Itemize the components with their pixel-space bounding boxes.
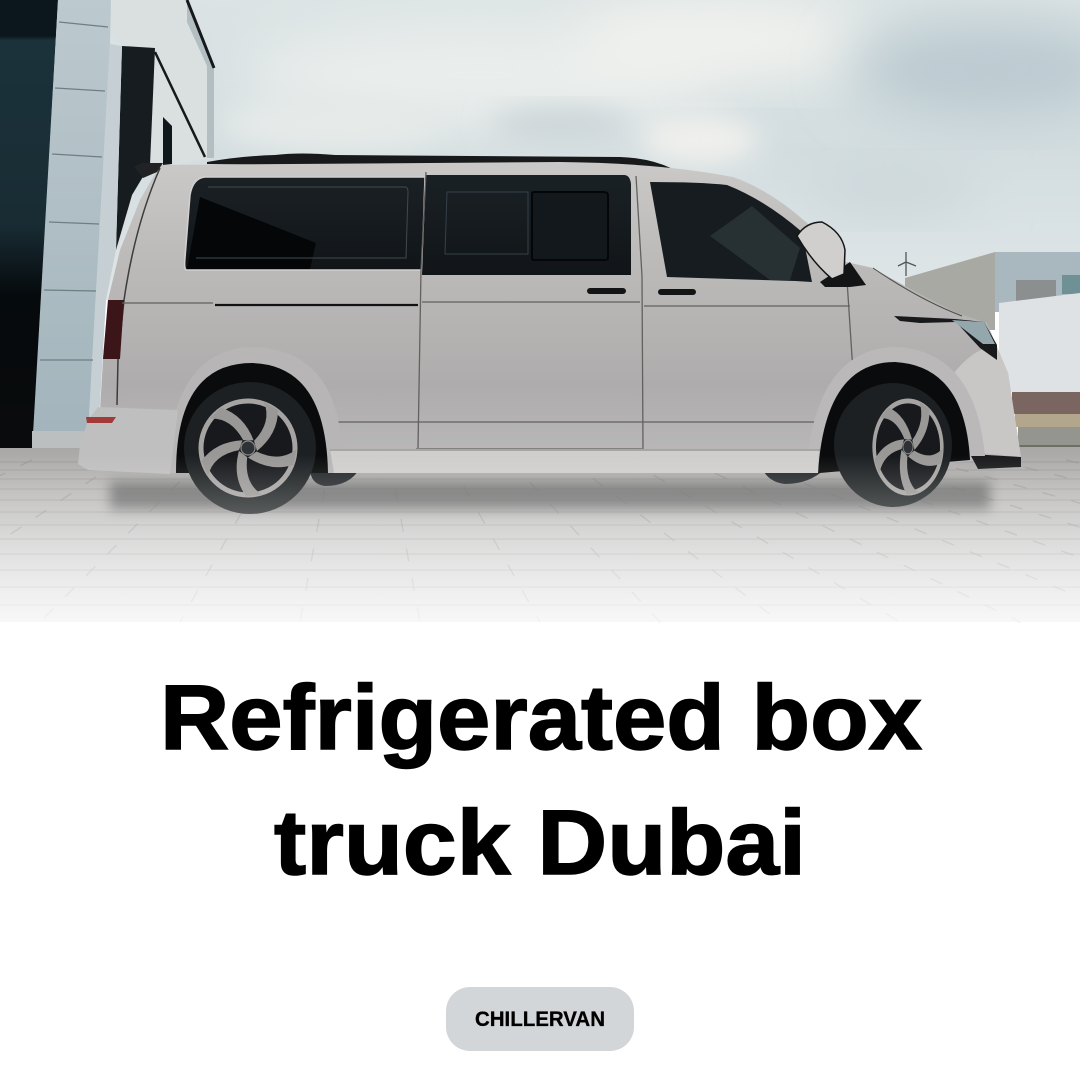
- far-side wheels: [310, 468, 826, 486]
- hood line: [873, 268, 962, 316]
- roof rail: [207, 154, 673, 169]
- photo: van in front of building: [0, 0, 1080, 622]
- ground paving: [0, 447, 1080, 622]
- sky with clouds: [0, 0, 1080, 300]
- middle window: [422, 175, 631, 275]
- title line 2: truck Dubai: [274, 792, 806, 894]
- door and panel lines: [122, 172, 853, 449]
- front bumper: [950, 347, 1021, 457]
- side skirt: [330, 449, 819, 473]
- side mirror: [797, 222, 866, 287]
- white fade at bottom of photo: [0, 455, 1080, 622]
- building left: [0, 0, 214, 448]
- tail light: [103, 300, 124, 359]
- front door window: [650, 182, 812, 282]
- distant building right: [898, 252, 1080, 455]
- brand pill: [446, 987, 634, 1051]
- rear spoiler: [134, 163, 163, 178]
- headlight: [894, 316, 997, 360]
- front wheel arch and wheel: [806, 347, 985, 507]
- van body: [100, 162, 1021, 473]
- rear bumper: [78, 407, 178, 474]
- ground shadow under van: [110, 482, 990, 510]
- door handles: [590, 291, 693, 292]
- title: [160, 667, 922, 894]
- rear hatch edge: [117, 168, 160, 405]
- title line 1: Refrigerated box: [160, 667, 922, 769]
- rear quarter window: [185, 177, 425, 270]
- rear wheel arch and wheel: [165, 347, 342, 514]
- van: [78, 154, 1021, 514]
- brand pill: CHILLERVAN: [475, 1008, 605, 1031]
